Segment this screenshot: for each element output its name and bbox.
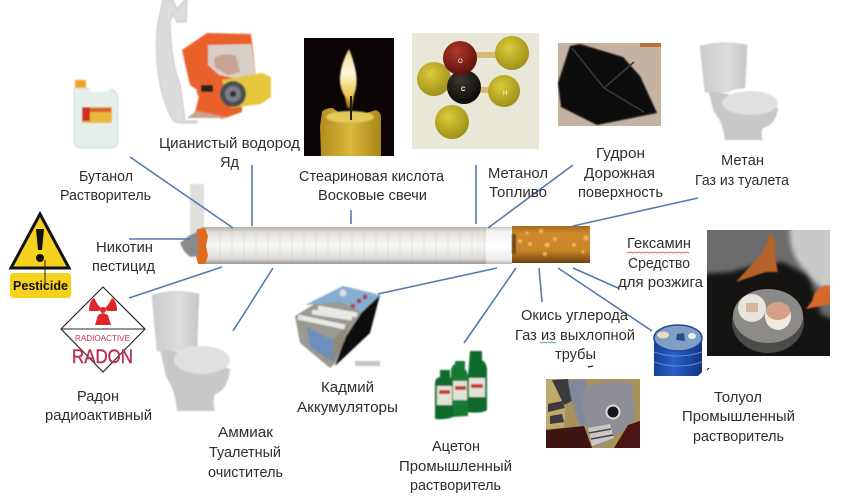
label: methane: Газ из туалета xyxy=(695,173,790,189)
icon: radon hazard diamond xyxy=(61,287,145,372)
label: carbon monoxide: Газ из выхлопной xyxy=(515,328,635,344)
label: acetone: Ацетон xyxy=(432,439,480,455)
label: ammonia: Аммиак xyxy=(218,425,274,441)
label: stearic acid: Восковые свечи xyxy=(318,188,427,204)
cigarette filter xyxy=(512,226,590,263)
ash and ember xyxy=(194,228,208,264)
label: methane: Метан xyxy=(721,153,764,169)
image: methanol molecule model: H xyxy=(503,91,507,97)
label: hexamine: для розжига xyxy=(618,275,704,291)
icon: car battery cutaway xyxy=(295,286,380,368)
label: ammonia: Туалетный xyxy=(209,445,281,461)
label: hexamine: Гексамин xyxy=(627,236,691,252)
label: tar: поверхность xyxy=(578,185,663,201)
icon: pesticide warning sign xyxy=(10,214,71,298)
smoke column xyxy=(190,184,204,234)
icon: pesticide warning sign: Pesticide xyxy=(13,279,68,293)
label: nicotine: Никотин xyxy=(96,240,153,256)
icon: toilet (methane) xyxy=(700,43,778,140)
icon: radon hazard diamond: RADON xyxy=(72,347,133,368)
label: hexamine: Средство xyxy=(628,256,690,272)
image: methanol molecule model: O xyxy=(458,59,463,65)
label: acetone: Промышленный xyxy=(399,459,512,475)
label: radon: Радон xyxy=(77,389,119,405)
spell-check underlines xyxy=(540,252,689,343)
label: ammonia: очиститель xyxy=(208,465,283,481)
label: hydrogen cyanide: Цианистый водород xyxy=(159,136,301,152)
label: nicotine: пестицид xyxy=(92,259,156,275)
image: candle xyxy=(304,38,394,156)
label: acetone: растворитель xyxy=(410,478,501,494)
label: cadmium: Кадмий xyxy=(321,380,374,396)
label: butanol: Растворитель xyxy=(60,188,151,204)
illustration: cigarette xyxy=(180,184,590,264)
label: stearic acid: Стеариновая кислота xyxy=(299,169,445,185)
label: cadmium: Аккумуляторы xyxy=(297,400,398,416)
icon: radon hazard diamond: RADIOACTIVE xyxy=(75,333,130,343)
image: methanol molecule model: C xyxy=(461,87,466,93)
cigarette paper xyxy=(201,227,512,264)
connector lines xyxy=(129,157,698,343)
icon: butanol canister xyxy=(74,80,118,148)
icon: blue solvent drum xyxy=(588,325,709,376)
label: tar: Гудрон xyxy=(596,146,645,162)
image: person in gas mask xyxy=(546,379,640,448)
label: methanol: Топливо xyxy=(489,185,547,201)
image: burning hexamine tablets xyxy=(707,230,830,356)
icon: toilet (ammonia) xyxy=(152,291,230,411)
label: tar: Дорожная xyxy=(584,166,655,182)
label: toluene: Толуол xyxy=(714,390,762,406)
label: methanol: Метанол xyxy=(488,166,548,182)
label: hydrogen cyanide: Яд xyxy=(220,155,240,171)
label: toluene: Промышленный xyxy=(682,409,795,425)
icon: acetone bottles xyxy=(435,351,487,419)
label: carbon monoxide: Окись углерода xyxy=(521,308,629,324)
label: toluene: растворитель xyxy=(693,429,784,445)
label: radon: радиоактивный xyxy=(45,408,152,424)
image: methanol molecule model xyxy=(412,33,539,149)
label: butanol: Бутанол xyxy=(79,169,133,185)
label: carbon monoxide: трубы xyxy=(555,347,596,363)
icon: escape hood with filter xyxy=(156,0,271,123)
image: lump of tar xyxy=(558,43,661,126)
